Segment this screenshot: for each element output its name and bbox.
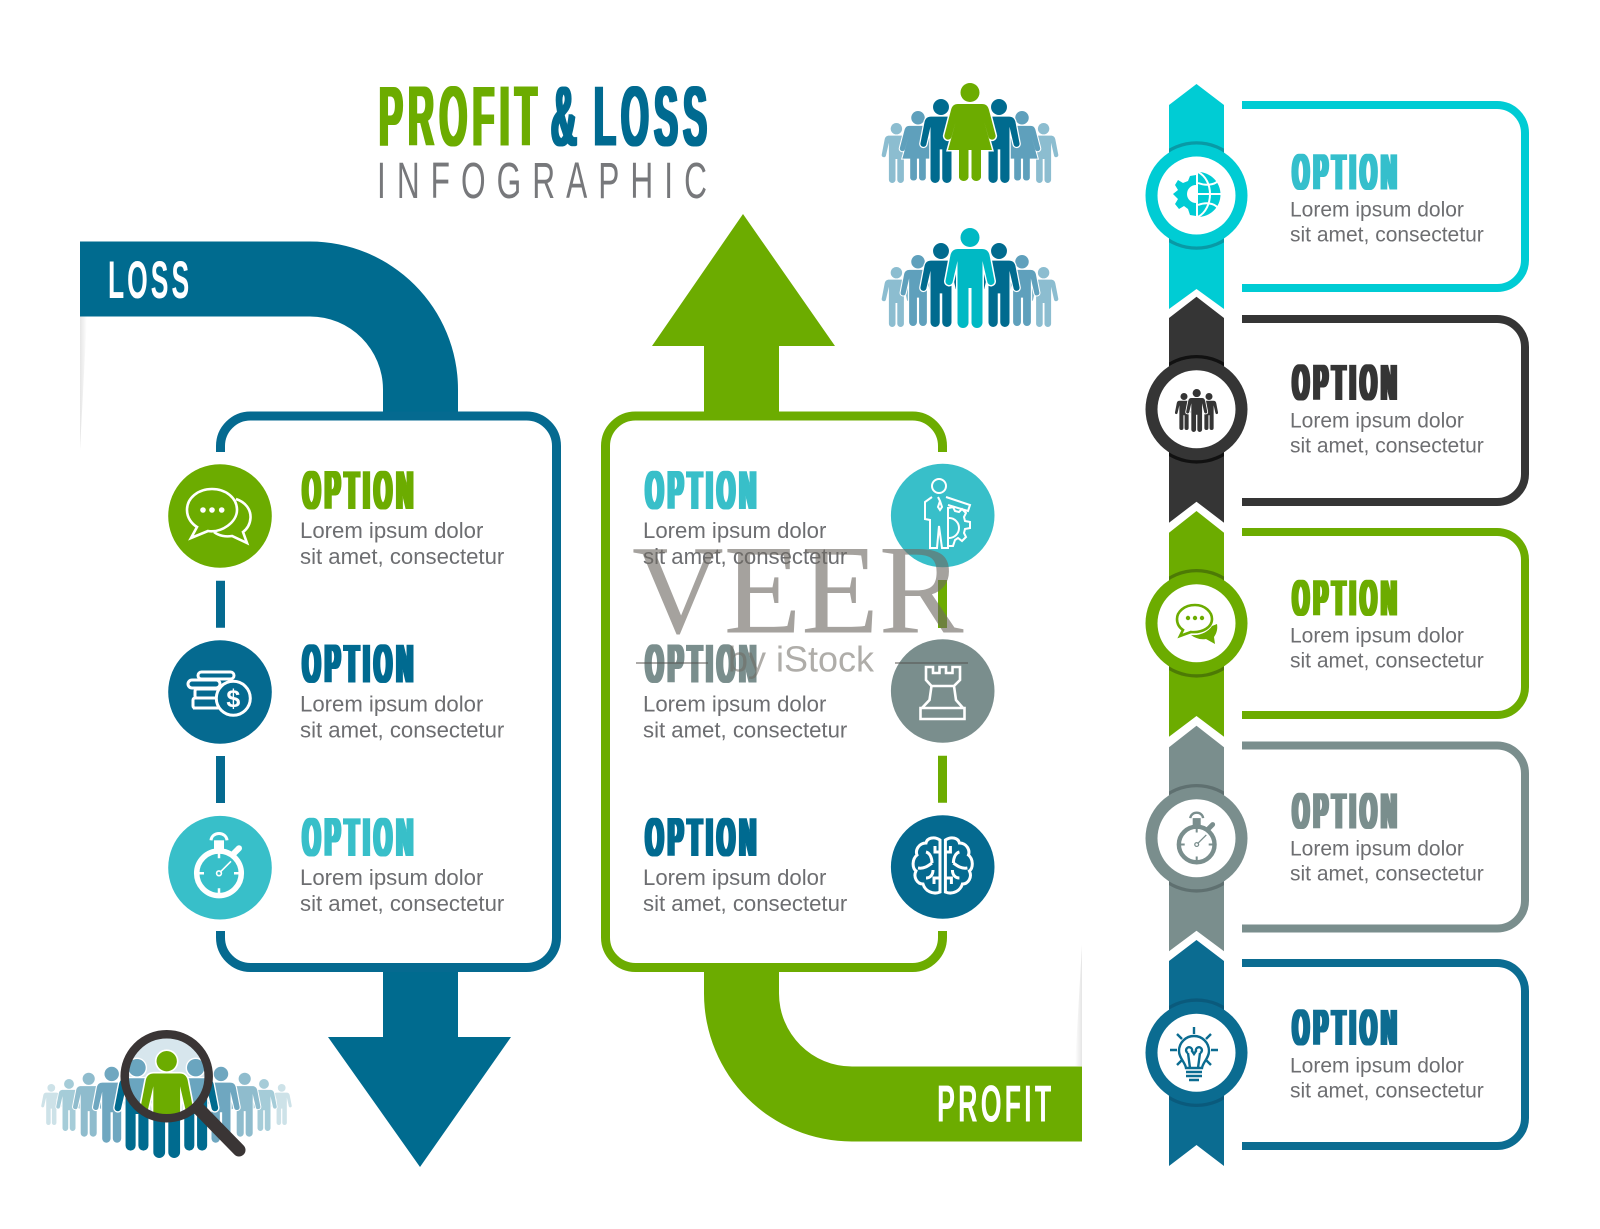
option 2 text: sit amet, consectetur: [300, 718, 504, 743]
icon: stopwatch: [168, 816, 272, 920]
option 3 text: sit amet, consectetur: [300, 891, 504, 916]
card 3 frame: [1242, 532, 1525, 715]
option 5 text: Lorem ipsum dolor: [643, 692, 826, 717]
option 1 text: Lorem ipsum dolor: [300, 518, 483, 543]
option 11 text: sit amet, consectetur: [1290, 1079, 1484, 1102]
option 1 text: sit amet, consectetur: [300, 544, 504, 569]
option 7 heading: OPTION: [1292, 145, 1401, 201]
people icon: man leader: [882, 228, 1058, 328]
loss bend: [80, 242, 458, 418]
option 7 text: sit amet, consectetur: [1290, 224, 1484, 247]
loss arrow head: [328, 965, 511, 1167]
option 4 heading: OPTION: [646, 459, 760, 521]
loss connectors: [216, 581, 225, 803]
icon: coins: [168, 640, 272, 744]
panel: step 5: [1142, 940, 1525, 1166]
option 2 text: Lorem ipsum dolor: [300, 692, 483, 717]
panel: loss: [168, 416, 556, 968]
card 1 frame: [1242, 105, 1525, 288]
ribbon 5: [1169, 940, 1224, 1166]
option 2 heading: OPTION: [302, 633, 417, 694]
option 9 heading: OPTION: [1292, 571, 1401, 627]
ribbon 1: [1169, 84, 1224, 309]
option 3 text: Lorem ipsum dolor: [300, 865, 483, 890]
panel: step 2: [1142, 297, 1525, 523]
panel: step 1: [1142, 84, 1525, 309]
option 6 text: sit amet, consectetur: [643, 891, 847, 916]
option 6 heading: OPTION: [646, 806, 760, 868]
profit arrow: [652, 214, 1082, 1142]
icon: chess rook: [891, 639, 994, 743]
watermark: [632, 521, 968, 680]
option 10 text: Lorem ipsum dolor: [1290, 837, 1464, 860]
loss panel frame: [220, 416, 556, 968]
badge 3: chat: [1142, 569, 1251, 678]
title: infographic: INFOGRAPHIC: [377, 152, 718, 209]
option 8 text: sit amet, consectetur: [1290, 434, 1484, 457]
option 4 text: Lorem ipsum dolor: [643, 518, 826, 543]
loss label: LOSS: [108, 250, 192, 309]
option 11 heading: OPTION: [1292, 1001, 1401, 1057]
profit arrow head: [652, 214, 835, 418]
option 5 heading: OPTION: [646, 633, 760, 694]
icon: chat: [168, 464, 272, 568]
profit connectors: [938, 580, 947, 803]
option 9 text: Lorem ipsum dolor: [1290, 625, 1464, 648]
option 10 heading: OPTION: [1292, 784, 1401, 840]
watermark byline: by iStock: [728, 639, 875, 680]
option 3 heading: OPTION: [302, 806, 417, 868]
card 5 frame: [1242, 963, 1525, 1146]
watermark word: VEER: [632, 521, 964, 661]
option 5 text: sit amet, consectetur: [643, 718, 847, 743]
title: profit: PROFIT: [379, 69, 542, 164]
title: loss: LOSS: [594, 69, 712, 164]
option 6 text: Lorem ipsum dolor: [643, 865, 826, 890]
badge 1: globe and gear: [1142, 141, 1251, 250]
title: [377, 69, 718, 209]
panel: step 4: [1142, 726, 1525, 951]
option 10 text: sit amet, consectetur: [1290, 862, 1484, 885]
badge 2: business team: [1142, 355, 1251, 464]
badge 5: light bulb: [1142, 998, 1251, 1107]
profit panel frame: [606, 416, 942, 968]
title: ampersand: &: [551, 69, 577, 164]
profit label: PROFIT: [937, 1074, 1054, 1133]
ribbon 4: [1169, 726, 1224, 951]
option 8 text: Lorem ipsum dolor: [1290, 409, 1464, 432]
profit bend: [704, 965, 1082, 1142]
icon: manager with gear: [891, 464, 994, 567]
loss arrow: [80, 242, 511, 1167]
panel: step 3: [1142, 511, 1525, 737]
icon: brain: [891, 815, 994, 919]
icon: coins: $: [226, 685, 240, 713]
ribbon 3: [1169, 511, 1224, 737]
panel: profit: [606, 416, 994, 968]
people icon: woman leader: [882, 83, 1058, 183]
option 4 text: sit amet, consectetur: [643, 544, 847, 569]
option 9 text: sit amet, consectetur: [1290, 650, 1484, 673]
card 2 frame: [1242, 319, 1525, 502]
option 1 heading: OPTION: [302, 459, 417, 521]
option 7 text: Lorem ipsum dolor: [1290, 199, 1464, 222]
card 4 frame: [1242, 746, 1525, 928]
badge 4: stopwatch: [1142, 784, 1251, 893]
option 8 heading: OPTION: [1292, 356, 1401, 412]
option 11 text: Lorem ipsum dolor: [1290, 1054, 1464, 1077]
ribbon 2: [1169, 297, 1224, 523]
icon: crowd under magnifying glass: [41, 1034, 292, 1158]
